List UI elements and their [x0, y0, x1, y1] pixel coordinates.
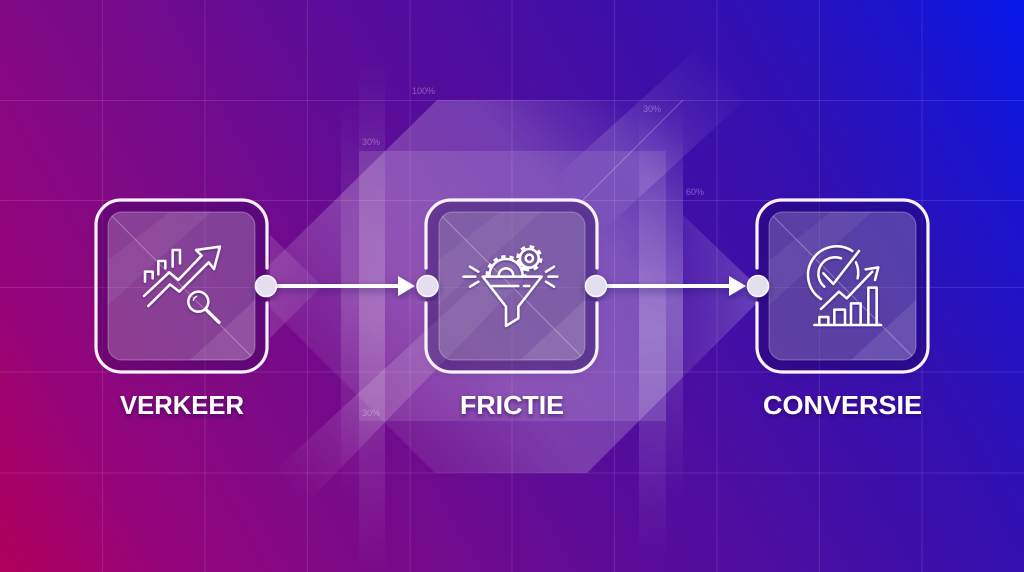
- lower-left diagonal band: [273, 262, 540, 503]
- arrow: frictie to conversie: [604, 276, 746, 296]
- triangle right of first card: [270, 235, 322, 338]
- label 30% right: 30%: [643, 104, 661, 114]
- triangle left of third card: [683, 215, 757, 377]
- card frame fill: [426, 200, 597, 372]
- icon: funnel with gears: [463, 247, 557, 326]
- card frame fill: [757, 200, 928, 372]
- card: conversie: [757, 200, 928, 372]
- large diagonal hexagon shape: [267, 100, 683, 473]
- left vertical band: [359, 60, 385, 572]
- label 30% left top: 30%: [362, 137, 380, 147]
- glass panel: [769, 212, 916, 360]
- right narrow vertical band: [666, 100, 683, 500]
- card outline: [426, 200, 597, 372]
- upper-right diagonal band: [560, 40, 745, 240]
- icon: target with check and bar chart: [808, 246, 881, 325]
- icon: rising chart with magnifier: [144, 247, 220, 322]
- card outline: [757, 200, 928, 372]
- card: verkeer: [96, 200, 267, 372]
- glass panel: [108, 212, 255, 360]
- label 100%: 100%: [412, 86, 435, 96]
- percentage labels: [362, 86, 704, 418]
- diagonal highlight line: [583, 100, 683, 200]
- card outline: [96, 200, 267, 372]
- arrow: verkeer to frictie: [274, 276, 415, 296]
- label: conversie: CONVERSIE: [763, 390, 922, 420]
- label 60%: 60%: [686, 187, 704, 197]
- right vertical band: [639, 100, 666, 560]
- label: frictie: FRICTIE: [460, 390, 564, 420]
- connector nodes: [256, 276, 768, 296]
- card: frictie: [426, 200, 597, 372]
- label: verkeer: VERKEER: [120, 390, 244, 420]
- glass panel: [438, 212, 585, 360]
- central glass rectangle: [359, 151, 666, 421]
- label 30% left bottom: 30%: [362, 408, 380, 418]
- card frame fill: [96, 200, 267, 372]
- left narrow vertical band: [341, 100, 359, 500]
- background glass shapes: [267, 40, 757, 572]
